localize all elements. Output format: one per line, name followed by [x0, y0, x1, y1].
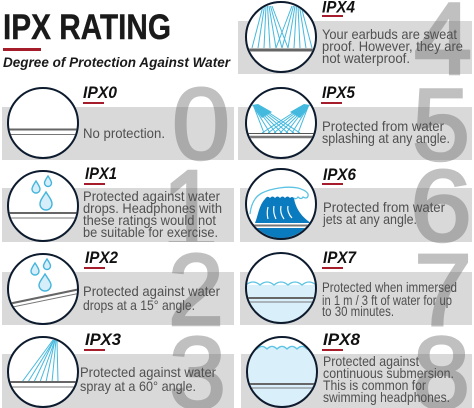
- number 5: 5: [412, 68, 470, 182]
- heading underline: [321, 102, 342, 104]
- description: IPX6: [322, 199, 445, 227]
- description: IPX4: Your earbuds are sweat: [322, 26, 457, 42]
- icon: IPX6 wave: [246, 169, 316, 241]
- heading underline: [83, 102, 104, 104]
- panel: IPX3: [2, 334, 234, 408]
- number 1: 1: [162, 146, 218, 276]
- panel: IPX8: [241, 334, 472, 408]
- heading underline: [322, 183, 343, 185]
- panel: IPX6: [240, 168, 472, 244]
- heading: IPX6: IPX6: [323, 166, 357, 184]
- description: IPX4: proof. However, they are: [322, 38, 463, 54]
- icon: IPX4 sweat spray: [246, 2, 316, 72]
- number 2: 2: [168, 233, 224, 347]
- heading underline: [322, 267, 343, 269]
- heading underline: [84, 183, 105, 185]
- description: IPX5: splashing at any angle.: [322, 130, 450, 146]
- description: IPX8: continuous submersion.: [323, 365, 454, 381]
- icon: IPX3 spray: [8, 337, 78, 407]
- description: IPX2: drops at a 15° angle.: [83, 297, 195, 313]
- panel: IPX0: [2, 86, 234, 162]
- heading: IPX2: IPX2: [85, 249, 118, 267]
- title accent bar: [3, 48, 41, 51]
- subtitle: Degree of Protection Against Water: [3, 55, 231, 70]
- heading: IPX3: IPX3: [85, 331, 121, 349]
- description: IPX7: [322, 279, 457, 319]
- icon: IPX8 submersion: [246, 336, 318, 408]
- panel: IPX2: [2, 252, 234, 326]
- heading: IPX8: IPX8: [323, 331, 361, 349]
- icon: IPX2 drops at angle: [8, 254, 78, 324]
- description: IPX8: This is common for: [323, 377, 426, 393]
- description: IPX1: drops. Headphones with: [83, 200, 222, 216]
- panel: IPX5: [238, 86, 472, 162]
- description: IPX4: [322, 26, 463, 66]
- description: IPX6: Protected from water: [323, 199, 445, 215]
- heading: IPX5: IPX5: [322, 84, 356, 102]
- heading underline: [322, 349, 343, 351]
- number 7: 7: [414, 233, 472, 347]
- description: IPX5: Protected from water: [322, 118, 444, 134]
- description: IPX1: Protected against water: [83, 188, 220, 204]
- description: IPX2: Protected against water: [83, 283, 220, 299]
- heading: IPX1: IPX1: [85, 165, 117, 183]
- description: IPX8: Protected against: [323, 353, 419, 369]
- description: IPX5: [322, 118, 450, 146]
- heading underline: [322, 15, 343, 17]
- description: IPX0: No protection.: [83, 125, 165, 141]
- description: IPX7: to 30 minutes.: [322, 303, 394, 319]
- panel: IPX7: [240, 252, 472, 326]
- panel: IPX1: [2, 168, 234, 242]
- icon: IPX0 no protection: [8, 88, 78, 158]
- number 0: 0: [172, 67, 230, 181]
- description: IPX1: [83, 188, 222, 240]
- heading: IPX0: IPX0: [83, 84, 118, 102]
- description: IPX3: [80, 364, 216, 394]
- title: IPX RATING: [3, 8, 171, 47]
- description: IPX6: jets at any angle.: [322, 211, 417, 227]
- heading underline: [84, 349, 105, 351]
- icon: IPX1 water drops: [8, 171, 78, 241]
- description: IPX3: spray at a 60° angle.: [80, 378, 196, 394]
- heading: IPX7: IPX7: [323, 249, 357, 267]
- description: IPX8: [323, 353, 454, 405]
- heading underline: [84, 267, 105, 269]
- description: IPX1: these ratings would not: [83, 212, 216, 228]
- description: IPX8: swimming headphones.: [323, 389, 450, 405]
- icon: IPX5 splash: [246, 88, 316, 158]
- description: IPX1: be suitable for exercise.: [83, 224, 218, 240]
- icon: IPX7 immersion: [246, 253, 316, 324]
- description: IPX4: not waterproof.: [322, 50, 410, 66]
- description: IPX3: Protected against water: [80, 364, 216, 380]
- description: IPX2: [83, 283, 220, 313]
- panel: IPX4: [238, 1, 472, 76]
- number 6: 6: [410, 149, 472, 263]
